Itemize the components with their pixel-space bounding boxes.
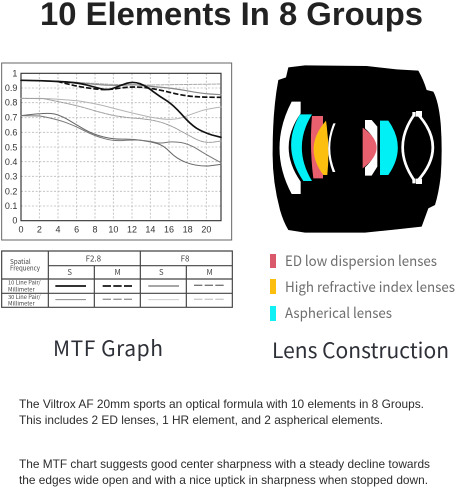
y axis labels: 0.8 (5, 98, 17, 108)
y axis labels: 0.3 (5, 172, 17, 182)
diagram: lens construction (273, 65, 442, 233)
aspherical element front (291, 114, 312, 181)
text block: elements: The Viltrox AF 20mm sports an optical formula with 10 elements in 8 Groups. (19, 397, 424, 411)
curves: F8 30 lines/mm (21, 80, 221, 166)
text block: MTF summary: the edges wide open and with a nice uptick in sharpness when stopped down. (19, 473, 428, 487)
y axis labels: 0.5 (5, 142, 17, 152)
plot axes (21, 73, 221, 221)
legend table: spatial frequency (2, 251, 232, 308)
y axis labels: 0.1 (5, 201, 17, 211)
curves: F8 10 lines/mm (21, 80, 221, 85)
ED element rear (363, 128, 377, 168)
heading: Lens Construction: Lens Construction (272, 335, 449, 365)
text block: MTF summary (19, 457, 430, 487)
x axis labels: 18 (183, 225, 193, 235)
curves: F2.8 30 lines/mm (21, 113, 221, 166)
mid white element (365, 120, 377, 176)
legend table: spatial frequency: 10 Line Pair/ (8, 278, 41, 287)
y axis labels: 0 (12, 216, 17, 226)
thin white element (328, 123, 336, 172)
x axis labels: 20 (201, 225, 211, 235)
label: aspherical: Aspherical lenses (285, 303, 392, 323)
legend table: spatial frequency: M (115, 267, 121, 278)
y axis labels (5, 69, 17, 226)
rear white doublet (403, 111, 433, 184)
front white element (279, 102, 301, 194)
text block: elements: This includes 2 ED lenses, 1 HR element, and 2 aspherical elements. (19, 413, 383, 427)
chart: MTF graph (2, 63, 232, 240)
swatch: ED (270, 254, 276, 268)
swatch: high refractive (270, 279, 276, 294)
legend table: spatial frequency: Millimeter (8, 299, 35, 308)
legend table: spatial frequency: M (207, 267, 213, 278)
label: ED: ED low dispersion lenses (285, 251, 437, 271)
text block: MTF summary: The MTF chart suggests good center sharpness with a steady decline towards (19, 457, 430, 471)
heading: MTF Graph: MTF Graph (53, 333, 163, 363)
legend table: spatial frequency: Frequency (10, 263, 40, 273)
legend table: spatial frequency: S (67, 267, 72, 278)
x axis labels (18, 225, 211, 235)
curves: F2.8 10 lines/mm (57, 81, 221, 97)
x axis labels: 2 (37, 225, 42, 235)
aspherical element rear (380, 121, 398, 175)
x axis labels: 12 (127, 225, 137, 235)
swatch: aspherical (270, 306, 276, 321)
y axis labels: 0.9 (5, 83, 17, 93)
legend table: spatial frequency: 30 Line Pair/ (8, 292, 41, 301)
legend table: spatial frequency: F8 (181, 254, 190, 265)
legend table: spatial frequency: Spatial (10, 256, 31, 266)
y axis labels: 0.2 (5, 186, 17, 196)
x axis labels: 6 (74, 225, 79, 235)
x axis labels: 8 (92, 225, 97, 235)
y axis labels: 0.4 (5, 157, 17, 167)
text block: elements (19, 397, 424, 427)
y axis labels: 0.6 (5, 127, 17, 137)
high refractive element (314, 121, 328, 175)
legend table: spatial frequency: F2.8 (86, 254, 102, 265)
y axis labels: 0.7 (5, 113, 17, 123)
x axis labels: 4 (55, 225, 60, 235)
legend table: spatial frequency: S (159, 267, 164, 278)
legend table: spatial frequency: Millimeter (8, 284, 35, 293)
y axis labels: 1 (12, 69, 17, 79)
ED element front (311, 116, 323, 178)
x axis labels: 16 (164, 225, 174, 235)
legend: lens types (270, 251, 455, 323)
x axis labels: 10 (108, 225, 118, 235)
x axis labels: 0 (18, 225, 23, 235)
x axis labels: 14 (145, 225, 155, 235)
lens barrel (273, 65, 442, 233)
